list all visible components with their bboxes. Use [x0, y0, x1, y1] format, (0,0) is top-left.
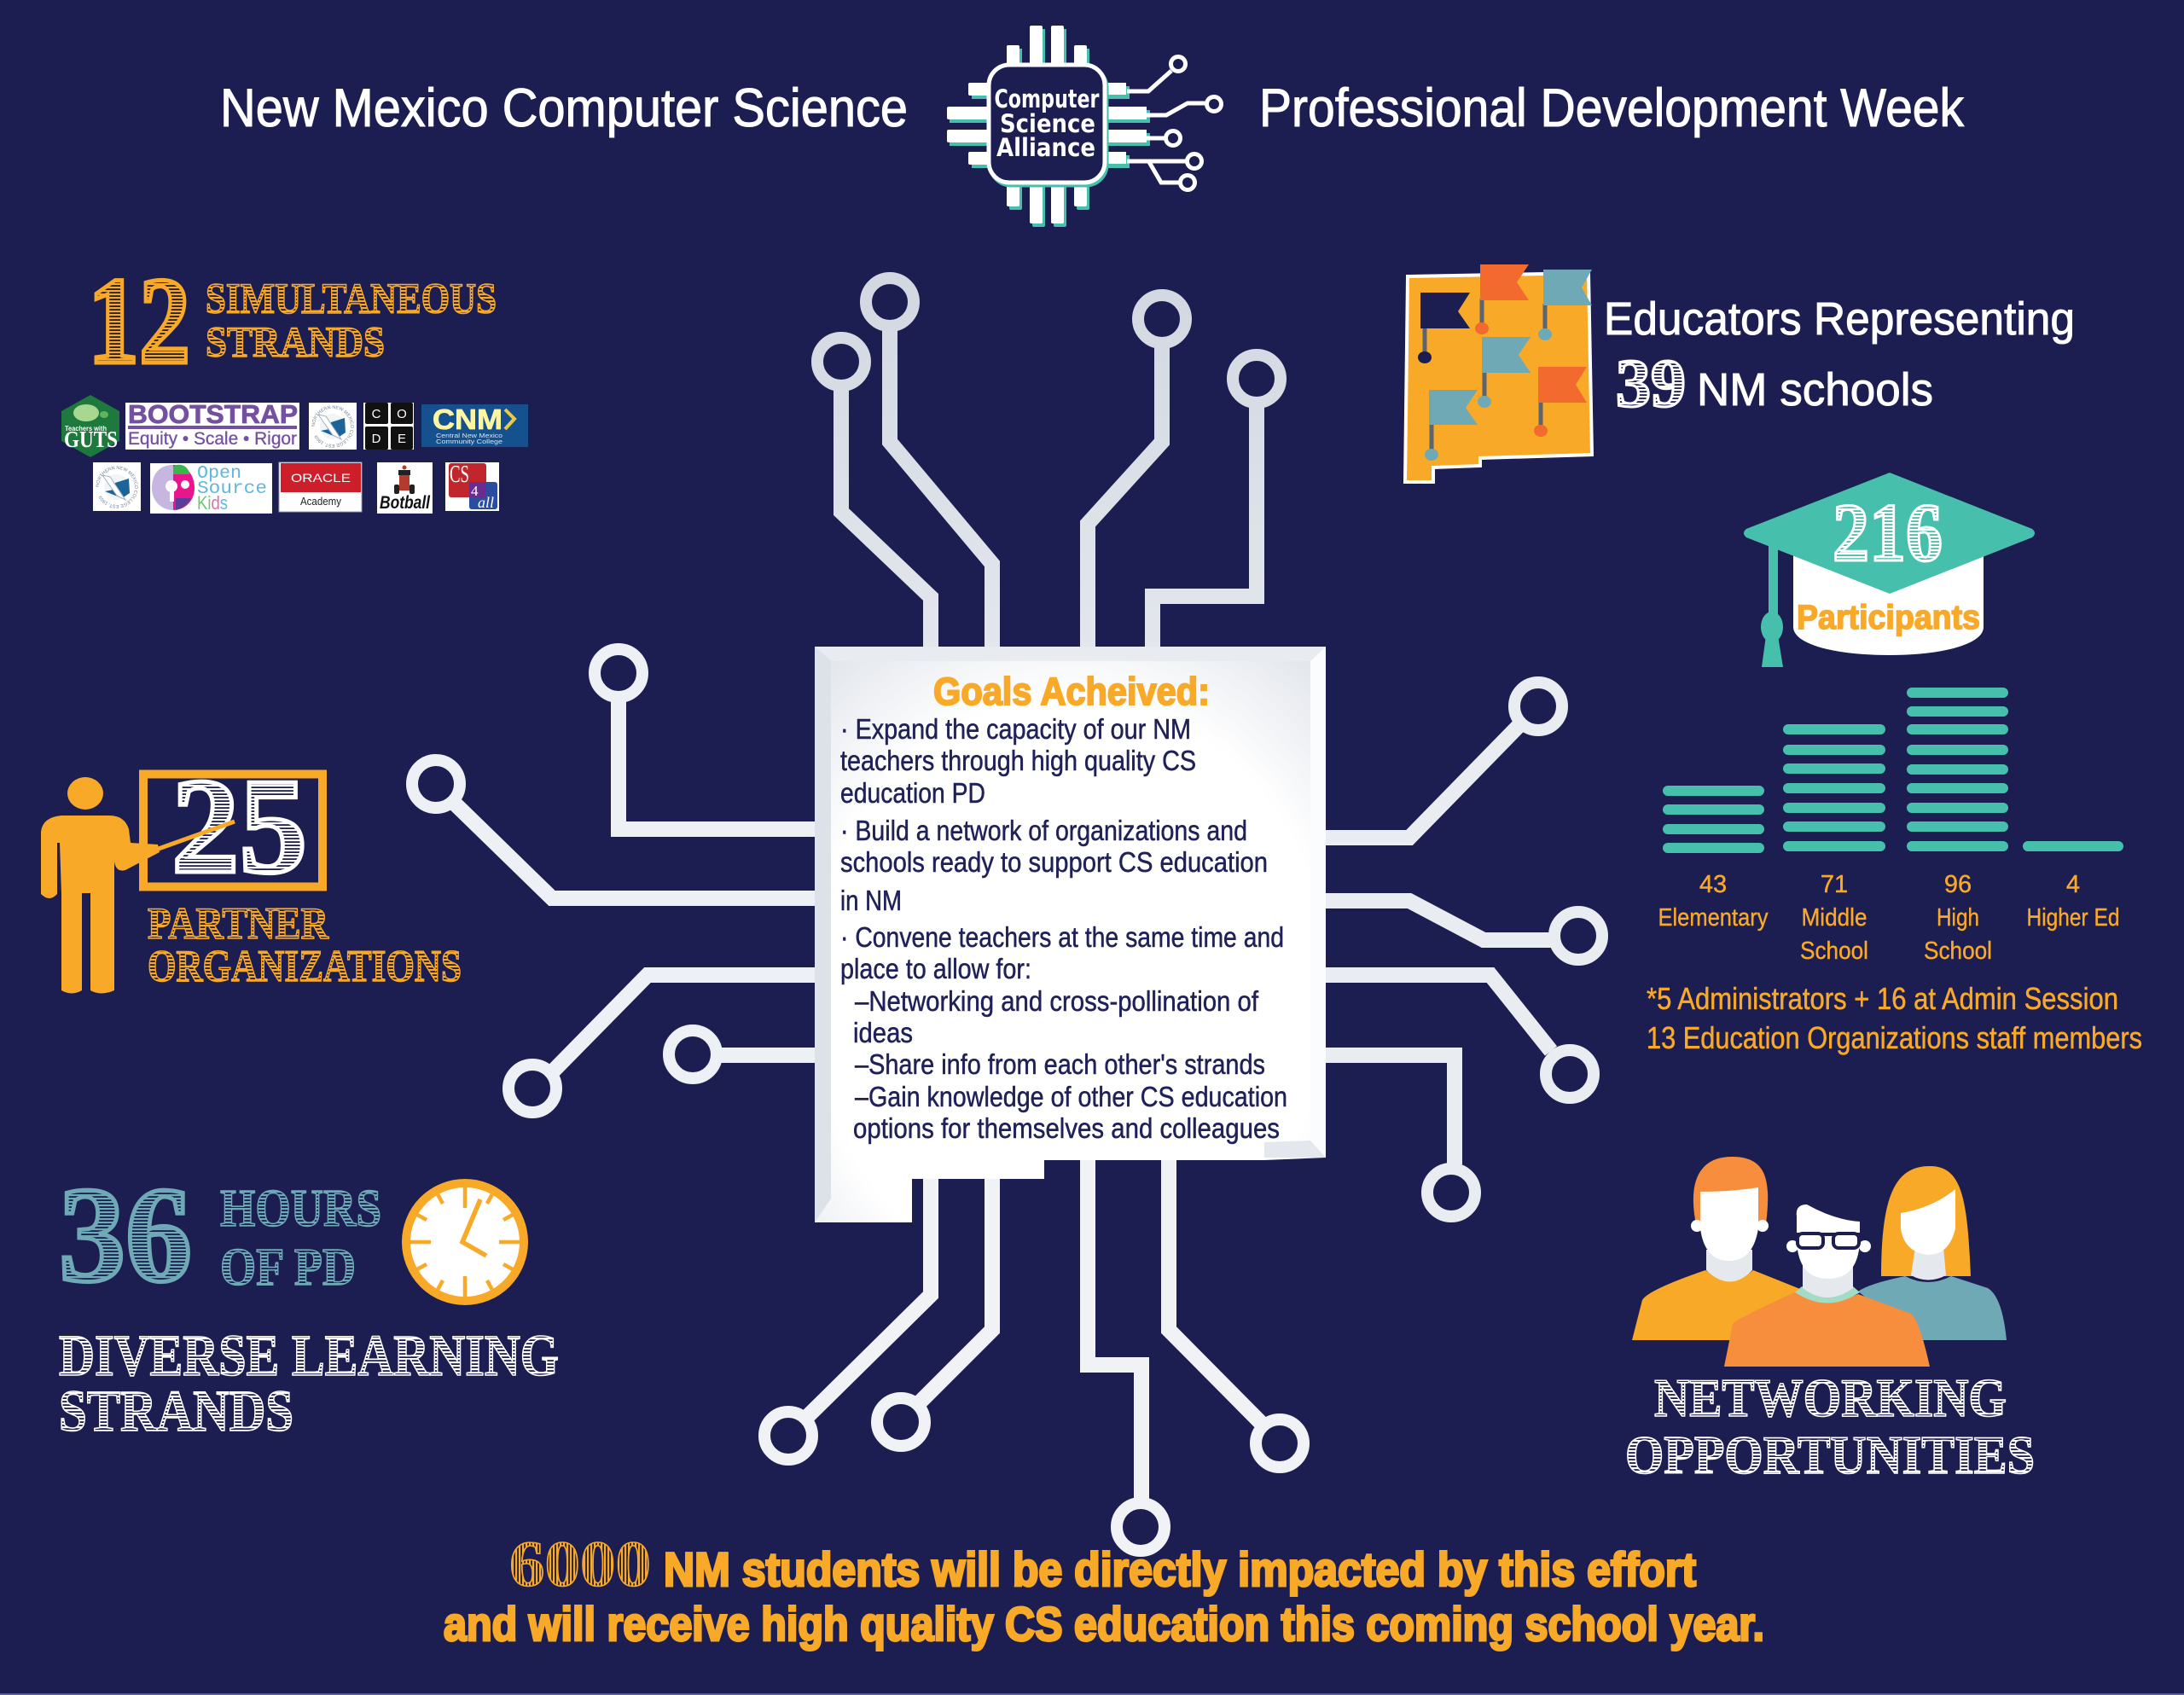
logo: CS4all: CS	[450, 461, 469, 488]
stat: 36 hours of PD: HOURS	[220, 1180, 381, 1238]
bar labels: 71	[1821, 871, 1848, 898]
note: administrators and staff	[1647, 981, 2142, 1055]
bar labels: Elementary	[1658, 904, 1769, 932]
logo: Open Source Kids: Open	[197, 464, 241, 484]
bottom traces	[764, 1143, 1304, 1551]
panel goals list	[840, 713, 1287, 1144]
logo: Oracle Academy	[279, 462, 362, 512]
stat: 36 hours of PD: 36	[59, 1158, 192, 1310]
panel heading: Goals Acheived:	[933, 670, 1210, 713]
stat: 36 hours of PD: OF PD	[220, 1239, 356, 1297]
icon: graduation cap with 216 participants: 216	[1833, 487, 1943, 578]
stat: 36 hours of PD	[59, 1158, 381, 1310]
bar chart: participants by level	[1658, 688, 2123, 965]
partner organizations label: ORGANIZATIONS	[148, 942, 462, 991]
person: centre man with glasses	[1724, 1204, 1930, 1367]
logo: Botball	[377, 462, 433, 514]
bar labels: 96	[1944, 871, 1972, 898]
logo: Open Source Kids	[150, 463, 272, 514]
flag poles and pins	[1425, 299, 1545, 452]
bar labels: Middle	[1802, 904, 1867, 932]
panel background	[815, 647, 1326, 1222]
panel goals list: –Networking and cross-pollination of	[855, 985, 1259, 1017]
title right: Professional Development Week	[1259, 78, 1964, 138]
bar labels	[1658, 871, 2119, 965]
stat: 12 simultaneous strands	[88, 252, 497, 390]
label: diverse learning strands: STRANDS	[59, 1379, 293, 1443]
panel goals list: teachers through high quality CS	[840, 745, 1196, 776]
label: networking opportunities	[1625, 1367, 2035, 1485]
chip label: Computer	[995, 84, 1100, 113]
logo: code.org: O	[397, 407, 407, 421]
panel goals list: schools ready to support CS education	[840, 846, 1268, 878]
bars: higher ed	[2023, 841, 2123, 851]
logo: Oracle Academy: Academy	[300, 496, 342, 508]
partner organizations label	[148, 899, 462, 991]
icon: teacher with board	[41, 750, 322, 993]
bars: elementary	[1663, 786, 1764, 853]
logo: Open Source Kids: Kids	[197, 492, 228, 514]
person: left man	[1632, 1157, 1800, 1340]
logo: Teachers with GUTS: Teachers with	[65, 424, 107, 432]
logo: Oracle Academy: ORACLE	[291, 471, 351, 485]
icon: teacher with board: 25	[171, 750, 307, 902]
panel goals list: options for themselves and colleagues	[853, 1112, 1280, 1144]
icon: graduation cap with 216 participants	[1744, 473, 2035, 667]
person: woman	[1858, 1166, 2007, 1340]
panel goals list: · Expand the capacity of our NM	[840, 713, 1191, 745]
bar labels: Higher Ed	[2027, 904, 2119, 932]
stat: educators representing 39 NM schools	[1604, 293, 2075, 421]
logo: CS4all	[445, 461, 499, 511]
logo: code.org: D	[372, 432, 381, 446]
bar labels: 4	[2066, 871, 2080, 898]
stat: 25 partner organizations	[41, 750, 462, 993]
panel: goals achieved	[815, 647, 1326, 1222]
footer: student impact statement: NM students will be directly impacted by this effort	[664, 1542, 1696, 1596]
panel goals list: –Gain knowledge of other CS education	[855, 1081, 1287, 1112]
chip label: Alliance	[996, 133, 1095, 162]
logo: Teachers with GUTS: GUTS	[64, 427, 118, 452]
footer: student impact statement	[444, 1529, 1764, 1651]
logo: Northern New Mexico College seal: NORTHERN NEW MEXICO COLLEGE EST. 1909	[311, 405, 354, 448]
label: diverse learning strands: DIVERSE LEARNING	[59, 1323, 559, 1388]
label: networking opportunities: NETWORKING	[1654, 1367, 2007, 1428]
stat: educators representing 39 NM schools: 39	[1616, 346, 1686, 421]
icon: clock	[406, 1183, 524, 1301]
partner organizations label: PARTNER	[148, 899, 329, 949]
footer: student impact statement: and will receive high quality CS education this coming school year.	[444, 1597, 1764, 1651]
icon: three people	[1632, 1157, 2007, 1367]
logo: Bootstrap	[125, 399, 299, 450]
footer: student impact statement: 6000	[509, 1529, 651, 1600]
logo: Open Source Kids: Source	[197, 479, 267, 499]
logo: Computer Science Alliance chip	[947, 26, 1222, 227]
chip label	[995, 84, 1100, 162]
panel goals list: –Share info from each other's strands	[855, 1048, 1265, 1080]
chip traces	[1127, 56, 1222, 189]
stat: educators representing 39 NM schools: Educators Representing	[1604, 293, 2075, 345]
logo: Botball: Botball	[380, 493, 431, 513]
logo: Bootstrap: BOOTSTRAP	[128, 399, 298, 429]
icon: New Mexico map with flags	[1405, 264, 1592, 482]
label: networking opportunities: OPPORTUNITIES	[1625, 1425, 2035, 1485]
bars: middle school	[1783, 724, 1885, 851]
bar labels: High	[1937, 904, 1979, 932]
bar labels: School	[1800, 937, 1868, 965]
circuit board traces	[412, 278, 1602, 1551]
logo: CNM: Central New Mexico	[436, 433, 502, 439]
panel goals list: · Convene teachers at the same time and	[840, 921, 1284, 953]
logo: Northern New Mexico College seal second: NORTHERN NEW MEXICO COLLEGE EST. 1909	[96, 466, 138, 508]
stat: 12 simultaneous strands: SIMULTANEOUS	[206, 276, 497, 323]
logo: CNM: CNM	[433, 403, 502, 435]
chip pins shadow	[950, 29, 1150, 227]
right traces	[1318, 682, 1602, 1216]
logo: code.org: C	[372, 407, 381, 421]
partner logos	[61, 395, 528, 514]
stat: 12 simultaneous strands: STRANDS	[206, 319, 385, 367]
icon: graduation cap with 216 participants: Participants	[1797, 599, 1980, 636]
logo: CS4all: all	[478, 494, 494, 511]
top traces	[817, 278, 1281, 657]
label: diverse learning strands	[59, 1323, 559, 1443]
flags	[1420, 264, 1592, 425]
chip body	[990, 67, 1107, 185]
title left: New Mexico Computer Science	[220, 78, 908, 138]
panel goals list: ideas	[853, 1017, 913, 1048]
logo: CNM: Community College	[436, 439, 502, 445]
logo: Bootstrap: Equity • Scale • Rigor	[128, 429, 297, 449]
logo: CS4all: 4	[471, 483, 479, 499]
panel goals list: · Build a network of organizations and	[840, 815, 1247, 846]
panel goals list: place to allow for:	[840, 953, 1031, 984]
stat: 12 simultaneous strands: 12	[88, 252, 190, 390]
chip label: Science	[1000, 109, 1095, 138]
panel goals list: in NM	[840, 885, 902, 916]
bar labels: School	[1924, 937, 1992, 965]
logo: CNM	[421, 403, 528, 447]
chip pins	[947, 26, 1147, 223]
bar labels: 43	[1699, 871, 1727, 898]
panel goals list: education PD	[840, 777, 985, 809]
logo: code.org	[363, 403, 414, 450]
bars: high school	[1907, 688, 2008, 851]
stat: educators representing 39 NM schools: NM schools	[1697, 364, 1933, 415]
logo: code.org: E	[398, 432, 406, 446]
logo: Teachers with GUTS	[61, 395, 119, 457]
note: administrators and staff: *5 Administrators + 16 at Admin Session	[1647, 981, 2118, 1016]
left traces	[412, 649, 823, 1112]
